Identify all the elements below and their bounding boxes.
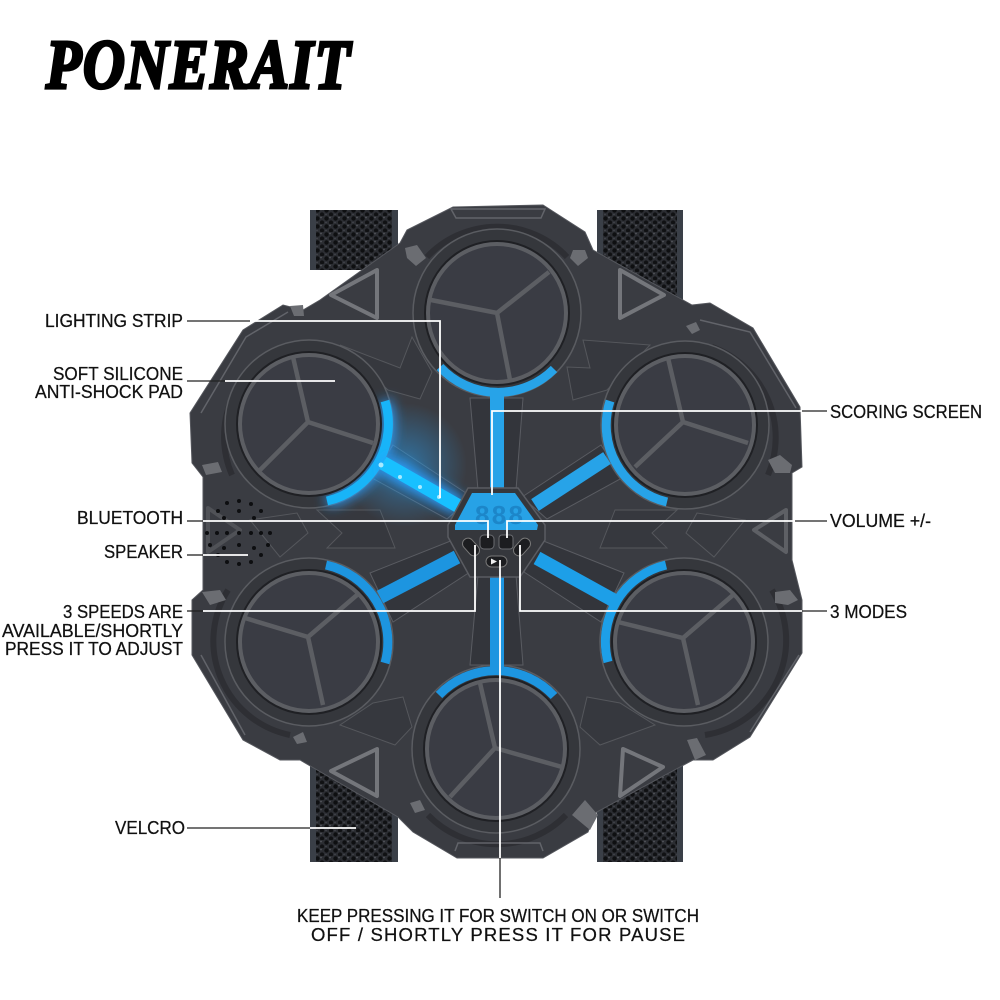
central control hub — [448, 488, 545, 577]
button: bluetooth — [480, 535, 494, 549]
play glyph — [491, 558, 497, 564]
screen digits: 888 — [475, 500, 523, 530]
button: mode — [511, 536, 533, 558]
label: scoring screen: SCORING SCREEN — [830, 401, 982, 422]
label: 3 speeds: 3 SPEEDS ARE — [63, 601, 183, 622]
icon: speaker grille — [205, 499, 272, 566]
label: 3 speeds: PRESS IT TO ADJUST — [5, 638, 183, 659]
callout leader lines: dark outside device — [187, 321, 827, 898]
pad: lower right — [600, 558, 768, 726]
label: soft silicone pad: SOFT SILICONE — [53, 363, 183, 384]
corner studs — [202, 245, 798, 830]
label: soft silicone pad: ANTI-SHOCK PAD — [35, 381, 183, 402]
device body — [190, 205, 802, 858]
label: speaker: SPEAKER — [104, 541, 183, 562]
button: play pause — [486, 556, 507, 567]
button: volume — [499, 535, 513, 549]
label: bluetooth: BLUETOOTH — [77, 507, 183, 528]
arm light spots — [378, 462, 441, 499]
label: 3 modes: 3 MODES — [830, 601, 907, 622]
pad: upper left (lit) — [225, 340, 393, 508]
label: 3 speeds: AVAILABLE/SHORTLY — [2, 620, 183, 641]
scoring screen — [455, 493, 538, 530]
pad: lower left — [225, 558, 393, 726]
button: speed — [460, 536, 482, 558]
label: velcro: VELCRO — [115, 817, 185, 838]
label: lighting strip: LIGHTING STRIP — [45, 310, 183, 331]
velcro straps — [310, 210, 683, 862]
glow behind lit arm — [343, 403, 467, 527]
arm flanks — [370, 398, 624, 665]
pad: top — [413, 229, 581, 397]
callout leader lines: white over device — [203, 321, 802, 858]
outer edge lobes — [213, 227, 786, 844]
title: brand logo: PONERAIT — [45, 26, 353, 103]
body facets — [250, 337, 745, 745]
triangular strap mounts — [208, 270, 786, 796]
pad: upper right — [601, 341, 769, 509]
label: volume: VOLUME +/- — [830, 510, 931, 531]
edge highlights — [201, 209, 799, 851]
blue lighting strip arms — [380, 390, 613, 672]
label: power switch line 1: KEEP PRESSING IT FOR SWITCH ON OR SWITCH — [297, 905, 699, 926]
label: power switch line 2: OFF / SHORTLY PRESS IT FOR PAUSE — [311, 924, 685, 945]
pad: bottom — [412, 665, 580, 833]
